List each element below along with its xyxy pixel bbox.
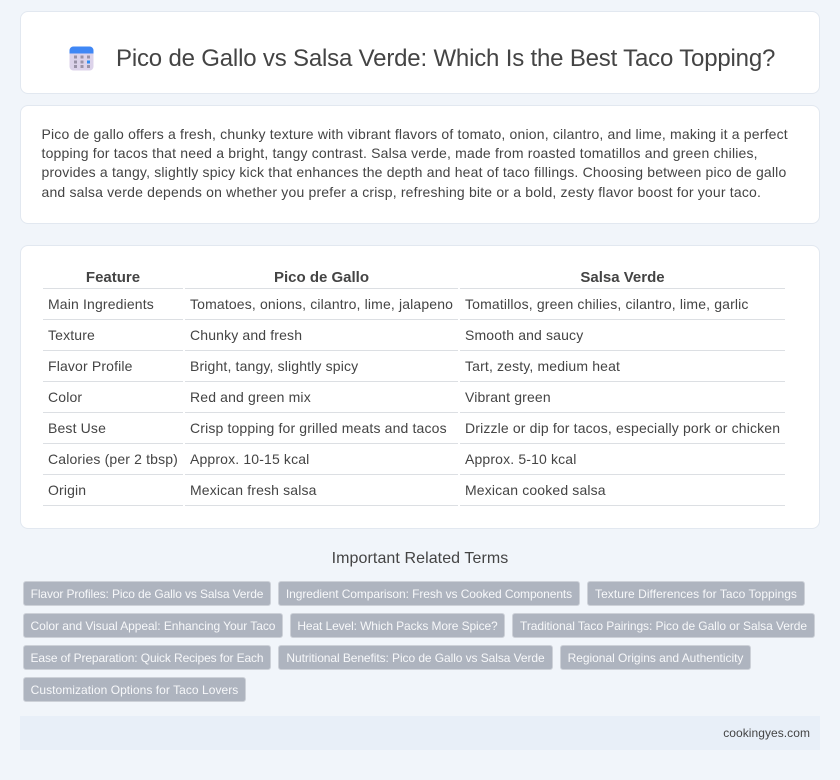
- row: calories: Approx. 10-15 kcal: [190, 451, 309, 467]
- row: origin: [48, 482, 606, 498]
- row: main ingredients: Main Ingredients: [48, 296, 154, 312]
- row: main ingredients: Tomatillos, green chilies, cilantro, lime, garlic: [465, 296, 749, 312]
- related term tags: Texture Differences for Taco Toppings: [595, 587, 797, 601]
- row: calories: Approx. 5-10 kcal: [465, 451, 576, 467]
- column headers: Salsa Verde: [580, 269, 665, 286]
- comparison table: [43, 269, 785, 506]
- icon: calendar: [70, 46, 94, 70]
- related terms heading: Important Related Terms: [332, 550, 508, 567]
- row: color: Red and green mix: [190, 389, 311, 405]
- row: flavor profile: Bright, tangy, slightly spicy: [190, 358, 358, 374]
- footer bar: [20, 716, 820, 750]
- row: flavor profile: Flavor Profile: [48, 358, 133, 374]
- column headers: Pico de Gallo: [274, 269, 369, 286]
- row: calories: Calories (per 2 tbsp): [48, 451, 178, 467]
- column headers: [86, 269, 665, 286]
- related term tags: [23, 581, 815, 702]
- related term tags: Ease of Preparation: Quick Recipes for Each: [31, 651, 263, 665]
- row: flavor profile: Tart, zesty, medium heat: [465, 358, 620, 374]
- related term tags: Flavor Profiles: Pico de Gallo vs Salsa Verde: [31, 587, 263, 601]
- row: flavor profile: [48, 358, 620, 374]
- intro paragraph: topping for tacos that need a bright, tangy contrast. Salsa verde, made from roasted tomatillos and green chilies,: [42, 145, 758, 161]
- row: best use: Crisp topping for grilled meats and tacos: [190, 420, 447, 436]
- row: calories: [48, 451, 576, 467]
- row: origin: Origin: [48, 482, 86, 498]
- column headers: Feature: [86, 269, 140, 286]
- footer site name: cookingyes.com: [723, 726, 810, 740]
- intro paragraph: provides a tangy, slightly spicy kick that enhances the depth and heat of taco fillings. Choosing between pico de gallo: [42, 164, 786, 180]
- row: color: [48, 389, 551, 405]
- related term tags: Regional Origins and Authenticity: [568, 651, 743, 665]
- row: main ingredients: Tomatoes, onions, cilantro, lime, jalapeno: [190, 296, 453, 312]
- row: main ingredients: [48, 296, 749, 312]
- row: best use: [48, 420, 780, 436]
- row: texture: Chunky and fresh: [190, 327, 302, 343]
- related term tags: Nutritional Benefits: Pico de Gallo vs Salsa Verde: [286, 651, 545, 665]
- related term tags: Heat Level: Which Packs More Spice?: [297, 619, 498, 633]
- row: best use: Best Use: [48, 420, 106, 436]
- related term tags: Ingredient Comparison: Fresh vs Cooked Components: [286, 587, 572, 601]
- row: best use: Drizzle or dip for tacos, especially pork or chicken: [465, 420, 780, 436]
- related term tags: Color and Visual Appeal: Enhancing Your Taco: [31, 619, 275, 633]
- row: color: Vibrant green: [465, 389, 551, 405]
- related term tags: Traditional Taco Pairings: Pico de Gallo or Salsa Verde: [520, 619, 807, 633]
- intro text card: [20, 105, 820, 224]
- intro paragraph: Pico de gallo offers a fresh, chunky texture with vibrant flavors of tomato, onion, cilantro, and lime, making it a perfect: [42, 126, 788, 142]
- row: texture: [48, 327, 584, 343]
- row: origin: Mexican cooked salsa: [465, 482, 606, 498]
- comparison table card: [20, 245, 820, 529]
- title: Pico de Gallo vs Salsa Verde: Which Is the Best Taco Topping?: [116, 45, 775, 72]
- related term tags: Customization Options for Taco Lovers: [31, 683, 238, 697]
- intro paragraph: [42, 126, 788, 200]
- intro paragraph: and salsa verde depends on whether you prefer a crisp, refreshing bite or a bold, zesty flavor boost for your taco.: [42, 184, 761, 200]
- row: texture: Texture: [48, 327, 95, 343]
- row: color: Color: [48, 389, 82, 405]
- row: texture: Smooth and saucy: [465, 327, 583, 343]
- row: origin: Mexican fresh salsa: [190, 482, 317, 498]
- header card: [20, 11, 820, 94]
